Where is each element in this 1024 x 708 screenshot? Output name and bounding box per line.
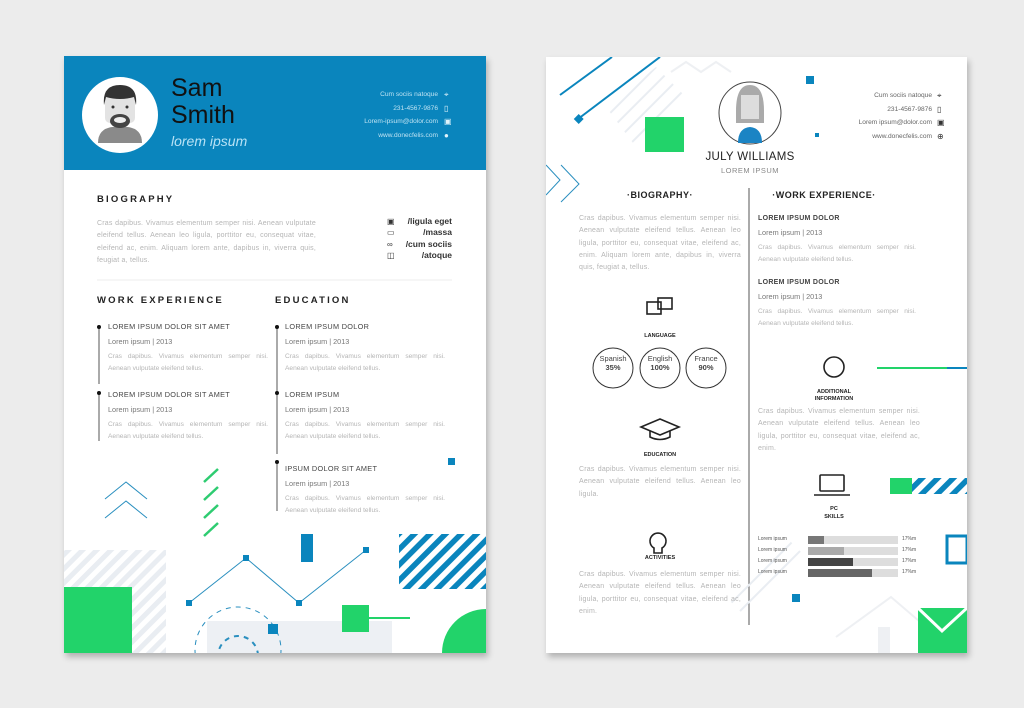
skill bar labels: Lorem ipsum	[758, 558, 787, 564]
education items: Cras dapibus. Vivamus elementum semper nisi. Aenean vulputate eleifend tellus.	[285, 495, 445, 514]
contacts	[859, 92, 932, 140]
work items: Lorem ipsum | 2013	[108, 337, 172, 346]
contact icons: ▣	[937, 118, 945, 127]
decorations: right page	[546, 57, 967, 653]
subtitle: lorem ipsum	[171, 133, 247, 149]
subtitle: LOREM IPSUM	[721, 166, 779, 175]
activities text: Cras dapibus. Vivamus elementum semper nisi. Aenean vulputate eleifend tellus. Aenean leo ligula, porttitor eu, consequat vitae, eleifend ac, enim.	[579, 571, 741, 615]
education items: Lorem ipsum | 2013	[285, 405, 349, 414]
work items: Lorem ipsum | 2013	[108, 405, 172, 414]
EDUCATION heading: EDUCATION	[275, 295, 351, 306]
education items: Cras dapibus. Vivamus elementum semper nisi. Aenean vulputate eleifend tellus.	[285, 353, 445, 372]
page: July Williams resume: France	[694, 354, 718, 363]
work items: Lorem ipsum | 2013	[758, 228, 822, 237]
social icons	[387, 217, 395, 260]
language circles	[599, 354, 718, 372]
contact icons: ▯	[444, 104, 448, 112]
language label: LANGUAGE	[644, 333, 676, 339]
contacts	[364, 91, 438, 138]
social list: /atoque	[422, 250, 452, 260]
work items: Cras dapibus. Vivamus elementum semper nisi. Aenean vulputate eleifend tellus.	[758, 308, 916, 327]
contact icons	[444, 90, 452, 140]
skill values: 17%m	[902, 547, 916, 553]
skill bar labels: Lorem ipsum	[758, 569, 787, 575]
page: July Williams resume: Spanish	[599, 354, 627, 363]
contacts: Cum sociis natoque	[874, 92, 932, 99]
contacts: 231-4567-9876	[393, 104, 438, 112]
contacts: Cum sociis natoque	[380, 91, 438, 98]
social icons: ∞	[387, 240, 393, 249]
contact icons: ⌖	[444, 90, 449, 99]
page: July Williams resume: 35%	[605, 363, 620, 372]
BIOGRAPHY heading: ·BIOGRAPHY·	[627, 190, 693, 200]
WORK EXPERIENCE heading: ·WORK EXPERIENCE·	[772, 190, 876, 200]
work items: Cras dapibus. Vivamus elementum semper nisi. Aenean vulputate eleifend tellus.	[108, 421, 268, 440]
bio text: Cras dapibus. Vivamus elementum semper nisi. Aenean vulputate eleifend tellus. Aenean leo ligula, porttitor eu, consequat vitae, eleifend ac, enim. Aliquam lorem ante, dapibus in, viverra quis, feugiat a, tellus.	[579, 215, 741, 271]
contacts: Lorem ipsum@dolor.com	[859, 119, 932, 126]
education items: LOREM IPSUM DOLOR	[285, 322, 369, 331]
contact icons: ●	[444, 130, 449, 140]
additional text: Cras dapibus. Vivamus elementum semper nisi. Aenean vulputate eleifend tellus. Aenean leo ligula, porttitor eu, consequat vitae, eleifend ac, enim.	[758, 408, 920, 452]
name: JULY WILLIAMS	[705, 151, 795, 163]
decorations: left page	[64, 77, 486, 653]
contact icons: ⌖	[937, 91, 942, 100]
contact icons: ⊕	[937, 132, 944, 140]
work items: Cras dapibus. Vivamus elementum semper nisi. Aenean vulputate eleifend tellus.	[108, 353, 268, 372]
header band	[64, 56, 486, 170]
education items: Lorem ipsum | 2013	[285, 337, 349, 346]
social list: /massa	[423, 227, 452, 237]
contacts: Lorem-ipsum@dolor.com	[364, 118, 438, 125]
contacts: www.donecfelis.com	[378, 132, 438, 138]
work items	[758, 215, 916, 327]
work items: LOREM IPSUM DOLOR SIT AMET	[108, 390, 230, 399]
education text: Cras dapibus. Vivamus elementum semper nisi. Aenean vulputate eleifend tellus. Aenean leo ligula.	[579, 466, 741, 498]
social list	[406, 216, 452, 260]
education items: Lorem ipsum | 2013	[285, 479, 349, 488]
bio text: Cras dapibus. Vivamus elementum semper nisi. Aenean vulputate eleifend tellus. Aenean leo ligula, porttitor eu, consequat vitae, eleifend ac, enim. Aliquam lorem ante, dapibus in, viverra quis, feugiat a, tellus.	[97, 220, 316, 264]
contact icons: ▯	[937, 104, 941, 114]
page: Sam Smith resume	[64, 56, 486, 653]
education items	[285, 322, 445, 514]
social list: /cum sociis	[406, 239, 452, 249]
page: July Williams resume: 90%	[698, 363, 714, 372]
education items: IPSUM DOLOR SIT AMET	[285, 464, 377, 473]
activities label: ACTIVITIES	[645, 555, 675, 561]
social list: /ligula eget	[408, 216, 452, 226]
skill values: 17%m	[902, 569, 916, 575]
social icons: ◫	[387, 251, 395, 260]
work items	[108, 322, 268, 440]
skill values	[902, 536, 916, 575]
contacts: 231-4567-9876	[887, 106, 932, 112]
work items: LOREM IPSUM DOLOR SIT AMET	[108, 322, 230, 331]
skill values: 17%m	[902, 558, 916, 564]
work items: Cras dapibus. Vivamus elementum semper nisi. Aenean vulputate eleifend tellus.	[758, 244, 916, 263]
name: Smith	[171, 101, 235, 129]
pc skills label: PC	[830, 506, 838, 512]
page: July Williams resume: English	[648, 354, 672, 363]
contacts: www.donecfelis.com	[872, 132, 932, 140]
contact icons	[937, 91, 945, 140]
additional information: ADDITIONAL	[817, 389, 851, 395]
social icons: ▣	[387, 217, 395, 226]
name	[171, 74, 235, 129]
education items: LOREM IPSUM	[285, 390, 339, 399]
name: Sam	[171, 74, 222, 102]
pc skills label	[824, 506, 844, 520]
education label: EDUCATION	[644, 452, 676, 458]
pc skills label: SKILLS	[824, 514, 844, 520]
WORK EXPERIENCE heading: WORK EXPERIENCE	[97, 295, 224, 306]
page: July Williams resume: 100%	[650, 363, 670, 372]
contact icons: ▣	[444, 117, 452, 126]
work items: LOREM IPSUM DOLOR	[758, 215, 840, 222]
BIOGRAPHY heading: BIOGRAPHY	[97, 194, 174, 205]
education items: Cras dapibus. Vivamus elementum semper nisi. Aenean vulputate eleifend tellus.	[285, 421, 445, 440]
additional information	[815, 389, 853, 402]
skill values: 17%m	[902, 536, 916, 542]
work items: LOREM IPSUM DOLOR	[758, 279, 840, 286]
additional information: INFORMATION	[815, 396, 853, 402]
skill bar labels: Lorem ipsum	[758, 536, 787, 542]
skill bar labels: Lorem ipsum	[758, 547, 787, 553]
skill bar labels	[758, 536, 787, 575]
work items: Lorem ipsum | 2013	[758, 292, 822, 301]
social icons: ▭	[387, 228, 395, 237]
page: July Williams resume	[546, 57, 967, 653]
